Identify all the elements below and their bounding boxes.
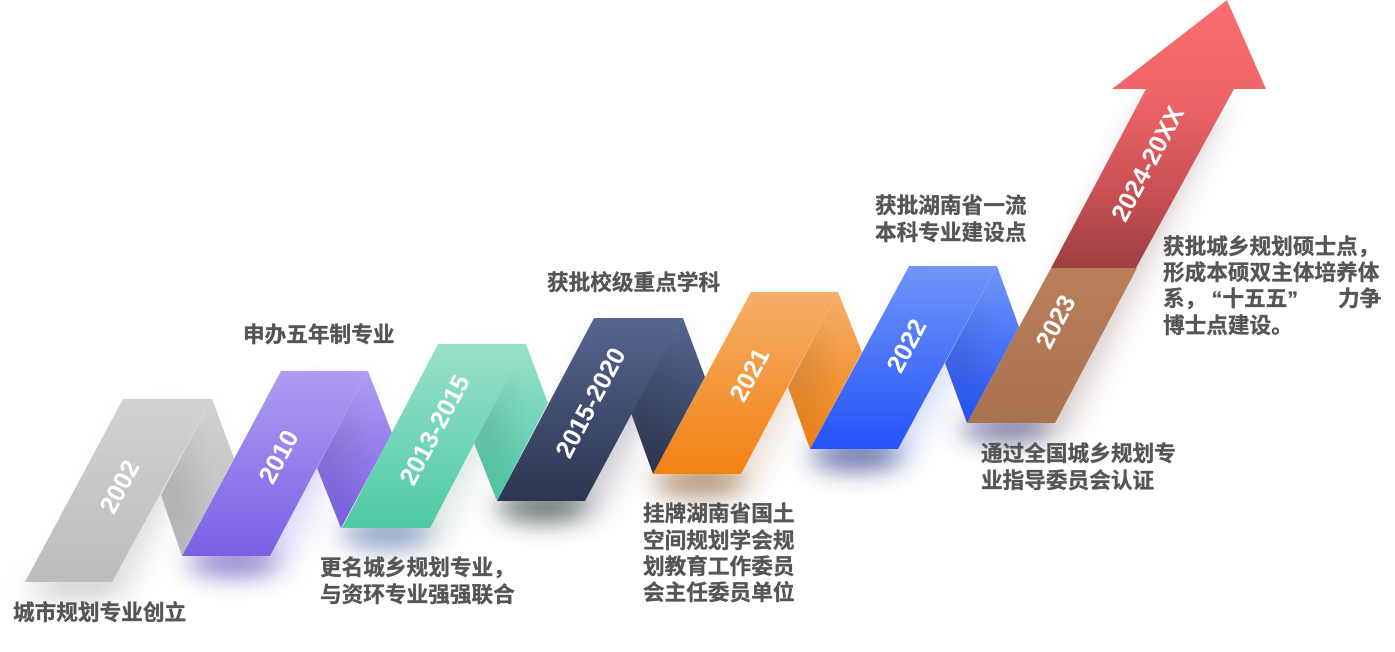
label: 2023: 业指导委员会认证: [981, 468, 1154, 493]
ribbon 2023: [967, 268, 1137, 423]
ribbon 2022: [810, 266, 1019, 449]
label: 2023: 通过全国城乡规划专: [981, 441, 1176, 466]
label: 2024-20XX: 博士点建设。: [1163, 313, 1293, 338]
arrow 2024-20XX: 2024-20XX: [1106, 102, 1190, 226]
label: 2024-20XX: 获批城乡规划硕士点，: [1163, 234, 1379, 259]
label: 2024-20XX: “十五五”: [1212, 286, 1298, 311]
ribbon 2013-2015: [342, 344, 548, 528]
label: 2024-20XX: 形成本硕双主体培养体: [1163, 260, 1380, 285]
ribbon 2021: [653, 292, 862, 474]
ribbon 2023: 2023: [1030, 291, 1082, 353]
label: 2024-20XX: 力争: [1338, 286, 1381, 311]
label: 2021: 会主任委员单位: [643, 580, 794, 605]
label: 2024-20XX: 系，: [1163, 286, 1206, 311]
soft ribbon shadows: [24, 105, 1225, 600]
label: 2013-2015: 与资环专业强强联合: [320, 582, 515, 607]
ribbon 2010: [182, 371, 392, 556]
label: 2015-2020: 获批校级重点学科: [547, 270, 720, 295]
label: 2013-2015: 更名城乡规划专业，: [320, 555, 515, 580]
label: 2022: 获批湖南省一流: [875, 193, 1027, 218]
label: 2021: 划教育工作委员: [643, 554, 794, 579]
arrow 2024-20XX: [1051, 0, 1266, 268]
label: 2022: 本科专业建设点: [875, 220, 1026, 245]
label: 2021: 空间规划学会规: [643, 528, 795, 553]
ribbon 2015-2020: [497, 318, 705, 501]
ribbon 2010: 2010: [253, 426, 305, 488]
ribbon 2002: [25, 399, 234, 582]
label: 2021: 挂牌湖南省国土: [643, 501, 794, 526]
ribbon 2022: 2022: [881, 315, 933, 377]
label: 2010: 申办五年制专业: [243, 322, 394, 347]
ribbon 2013-2015: 2013-2015: [394, 370, 476, 490]
ribbon 2002: 2002: [94, 456, 146, 518]
label: 2002: 城市规划专业创立: [13, 600, 186, 625]
ribbon 2021: 2021: [724, 344, 776, 406]
ribbon 2015-2020: 2015-2020: [550, 343, 632, 463]
